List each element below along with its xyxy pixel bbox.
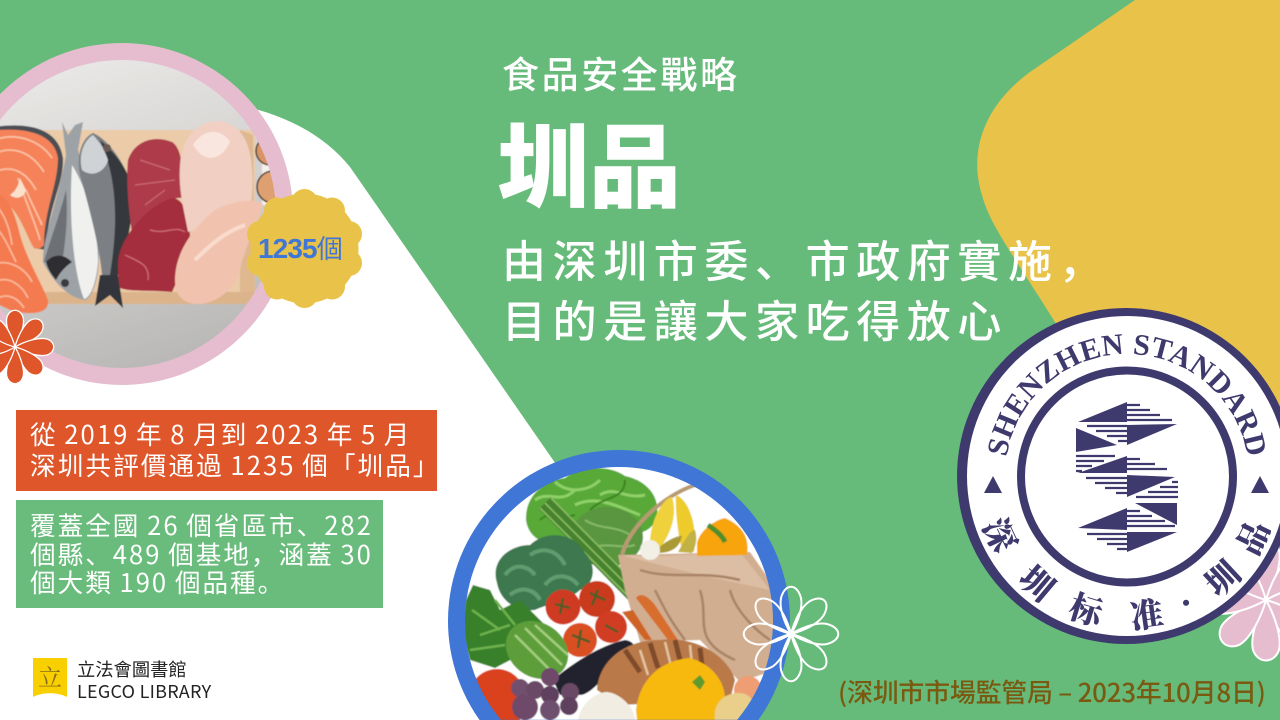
library name: LEGCO LIBRARY (77, 678, 212, 704)
logo: Shenzhen Standard seal: 圳 (1010, 553, 1066, 611)
logo: Shenzhen Standard seal: 标 (1064, 581, 1112, 637)
logo: Shenzhen Standard seal: 品 (1223, 512, 1280, 562)
library name: 立法會圖書館 (77, 656, 187, 682)
logo: Shenzhen Standard seal: SHENZHEN STANDARD (988, 334, 1265, 456)
library name (77, 656, 212, 704)
icon: white outline flower (744, 587, 838, 681)
panel: green callout (16, 500, 383, 608)
photo: vegetables and groceries in blue ring (448, 450, 790, 720)
badge label: 1235個: 1235個 (258, 229, 343, 266)
description text (502, 226, 1109, 350)
logo: Shenzhen Standard seal: · (1171, 578, 1201, 625)
logo: Shenzhen Standard seal: 圳 (1193, 549, 1250, 606)
icon: pink flower (1206, 540, 1280, 660)
background: yellow blob (977, 0, 1280, 500)
subtitle: 食品安全戰略: 食品安全戰略 (502, 45, 740, 99)
description text: 由深圳市委、市政府實施， (502, 226, 1109, 290)
panel: green callout: 覆蓋全國 26 個省區市、282 (30, 506, 373, 543)
source note: (深圳市市場監管局 – 2023年10月8日) (838, 673, 1266, 710)
panel: green callout: 個縣、489 個基地，涵蓋 30 (30, 534, 373, 572)
logo: Shenzhen Standard seal (957, 308, 1280, 644)
title: 圳品: 圳品 (497, 94, 681, 227)
badge: wavy yellow seal (247, 189, 362, 308)
logo: LegCo Library shield: 立 (38, 658, 62, 693)
description text: 目的是讓大家吃得放心 (502, 286, 1008, 350)
panel: green callout: 個大類 190 個品種。 (30, 563, 285, 600)
panel: orange callout: 從 2019 年 8 月到 2023 年 5 月 (30, 415, 411, 452)
icon: orange flower (0, 310, 54, 384)
logo: LegCo Library shield (33, 658, 67, 697)
logo: Shenzhen Standard seal: 准 (1127, 588, 1166, 639)
panel: orange callout (16, 410, 437, 491)
photo: meat and fish in pink ring (0, 43, 293, 385)
background: white wedge (0, 100, 560, 720)
logo: Shenzhen Standard seal: 深 (973, 510, 1030, 559)
panel: orange callout: 深圳共評價通過 1235 個「圳品」 (30, 446, 441, 483)
